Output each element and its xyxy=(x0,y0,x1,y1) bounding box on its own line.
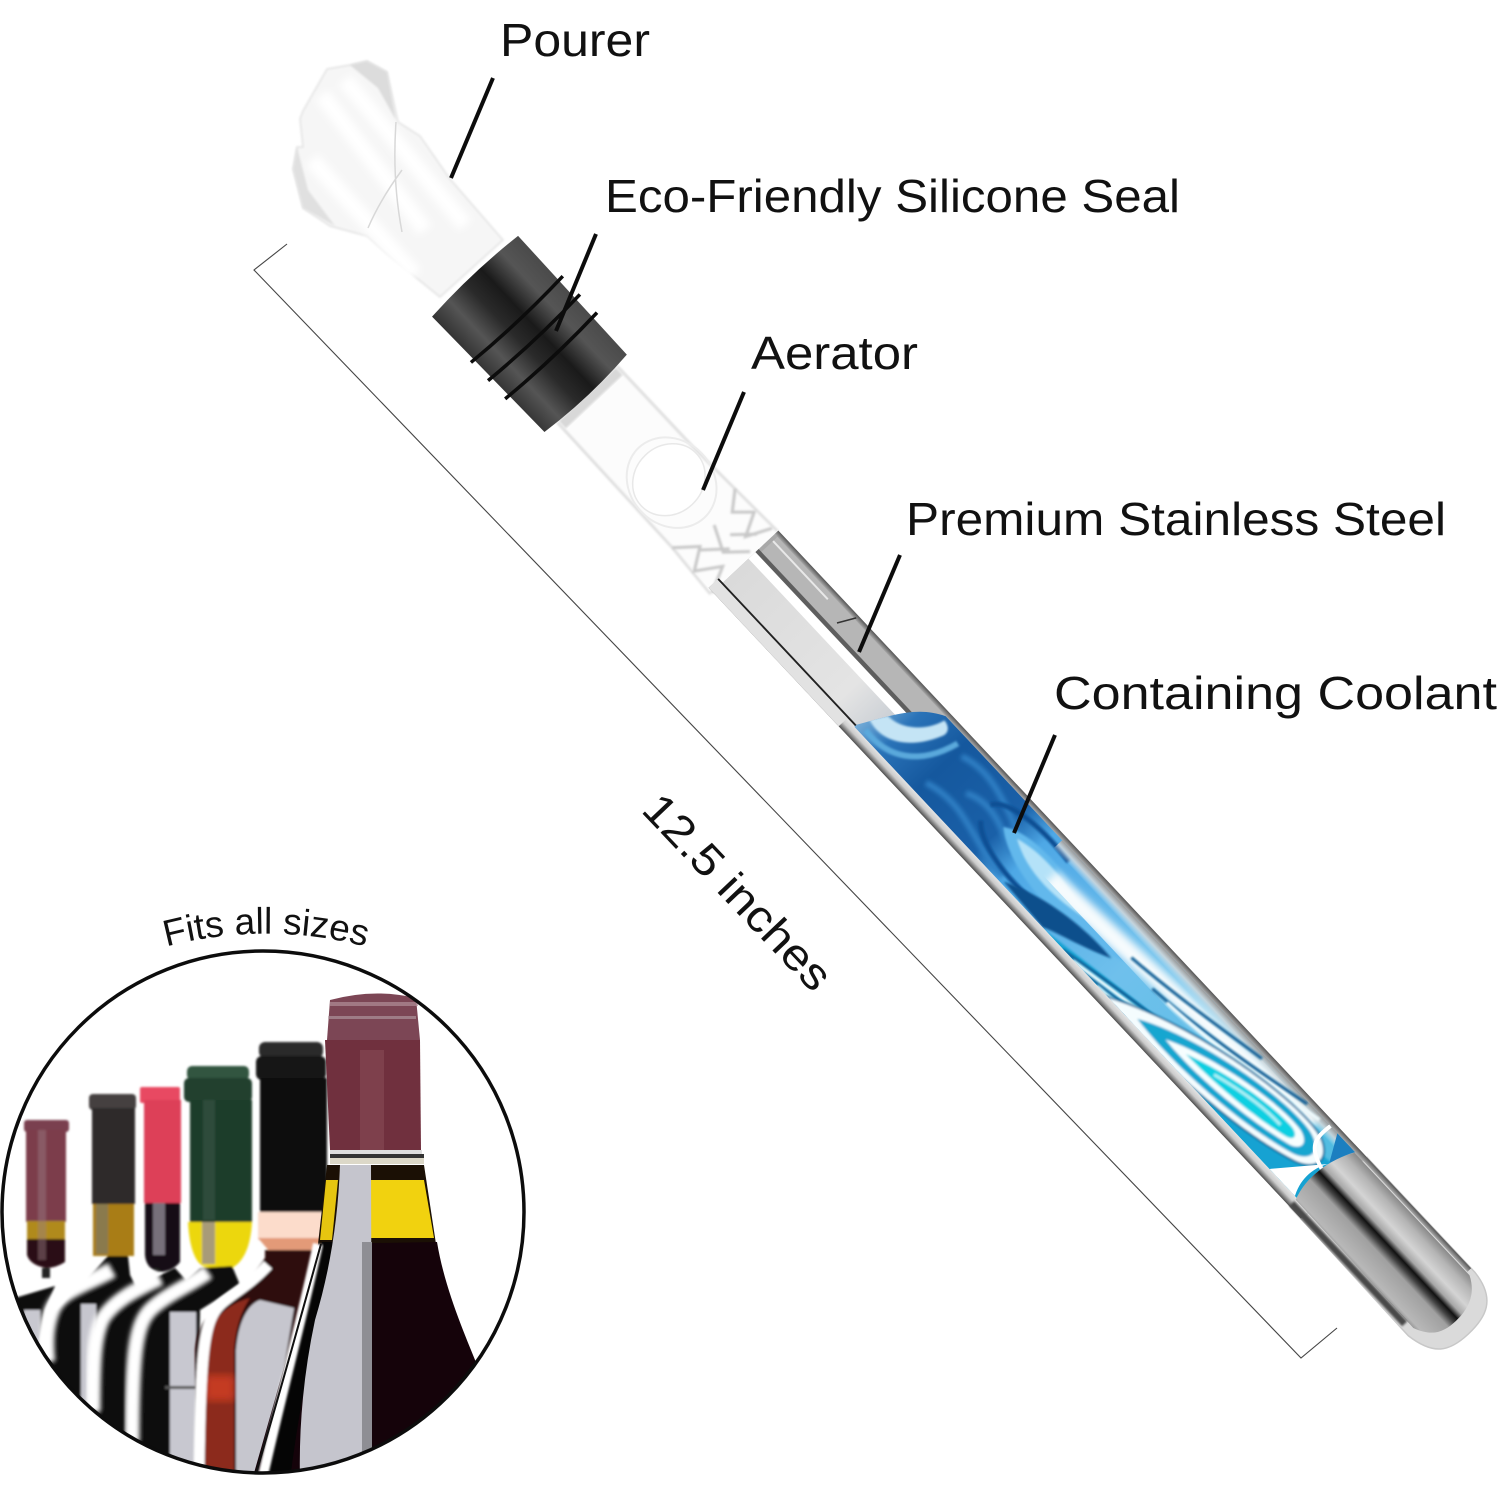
coolant swirl xyxy=(854,712,1355,1198)
label: Pourer xyxy=(451,14,650,178)
bottles group xyxy=(18,994,476,1472)
silicone seal xyxy=(428,231,634,438)
stainless steel tube xyxy=(709,526,1367,1219)
Containing leader xyxy=(1014,735,1055,833)
bottle 1 maroon xyxy=(15,1120,69,1350)
Eco-Friendly text: Eco-Friendly Silicone Seal xyxy=(605,170,1180,222)
bottle 5 black cap xyxy=(195,1042,340,1480)
dimension bracket xyxy=(254,244,1337,1358)
Eco-Friendly leader xyxy=(556,234,596,331)
steel end rod xyxy=(1284,1140,1497,1365)
label: Premium Stainless Steel xyxy=(859,493,1446,652)
Premium leader xyxy=(859,555,900,652)
Containing text: Containing Coolant xyxy=(1054,667,1497,719)
pourer head xyxy=(293,61,503,297)
Premium text: Premium Stainless Steel xyxy=(906,493,1446,545)
circle outline xyxy=(2,951,524,1473)
rotated body of the wand xyxy=(428,231,1497,1376)
wine aerator product xyxy=(293,61,1497,1376)
bottle 2 dark cap xyxy=(38,1092,138,1403)
label: Containing Coolant xyxy=(1014,667,1497,833)
Aerator text: Aerator xyxy=(751,327,918,379)
bottle 3 pink cap xyxy=(93,1087,190,1480)
Pourer leader xyxy=(451,78,493,178)
bottle circle xyxy=(0,950,530,1482)
curved caption: Fits all sizes: Fits all sizes xyxy=(163,906,368,946)
Aerator leader xyxy=(703,392,744,490)
label: Aerator xyxy=(703,327,918,490)
dimension label: 12.5 inches: 12.5 inches xyxy=(633,784,842,1001)
bottle 4 green cap xyxy=(130,1066,252,1482)
label: Eco-Friendly Silicone Seal xyxy=(556,170,1180,331)
clear aerator section xyxy=(552,362,780,597)
bottle 6 large maroon cap xyxy=(252,993,480,1482)
Pourer text: Pourer xyxy=(500,14,650,66)
